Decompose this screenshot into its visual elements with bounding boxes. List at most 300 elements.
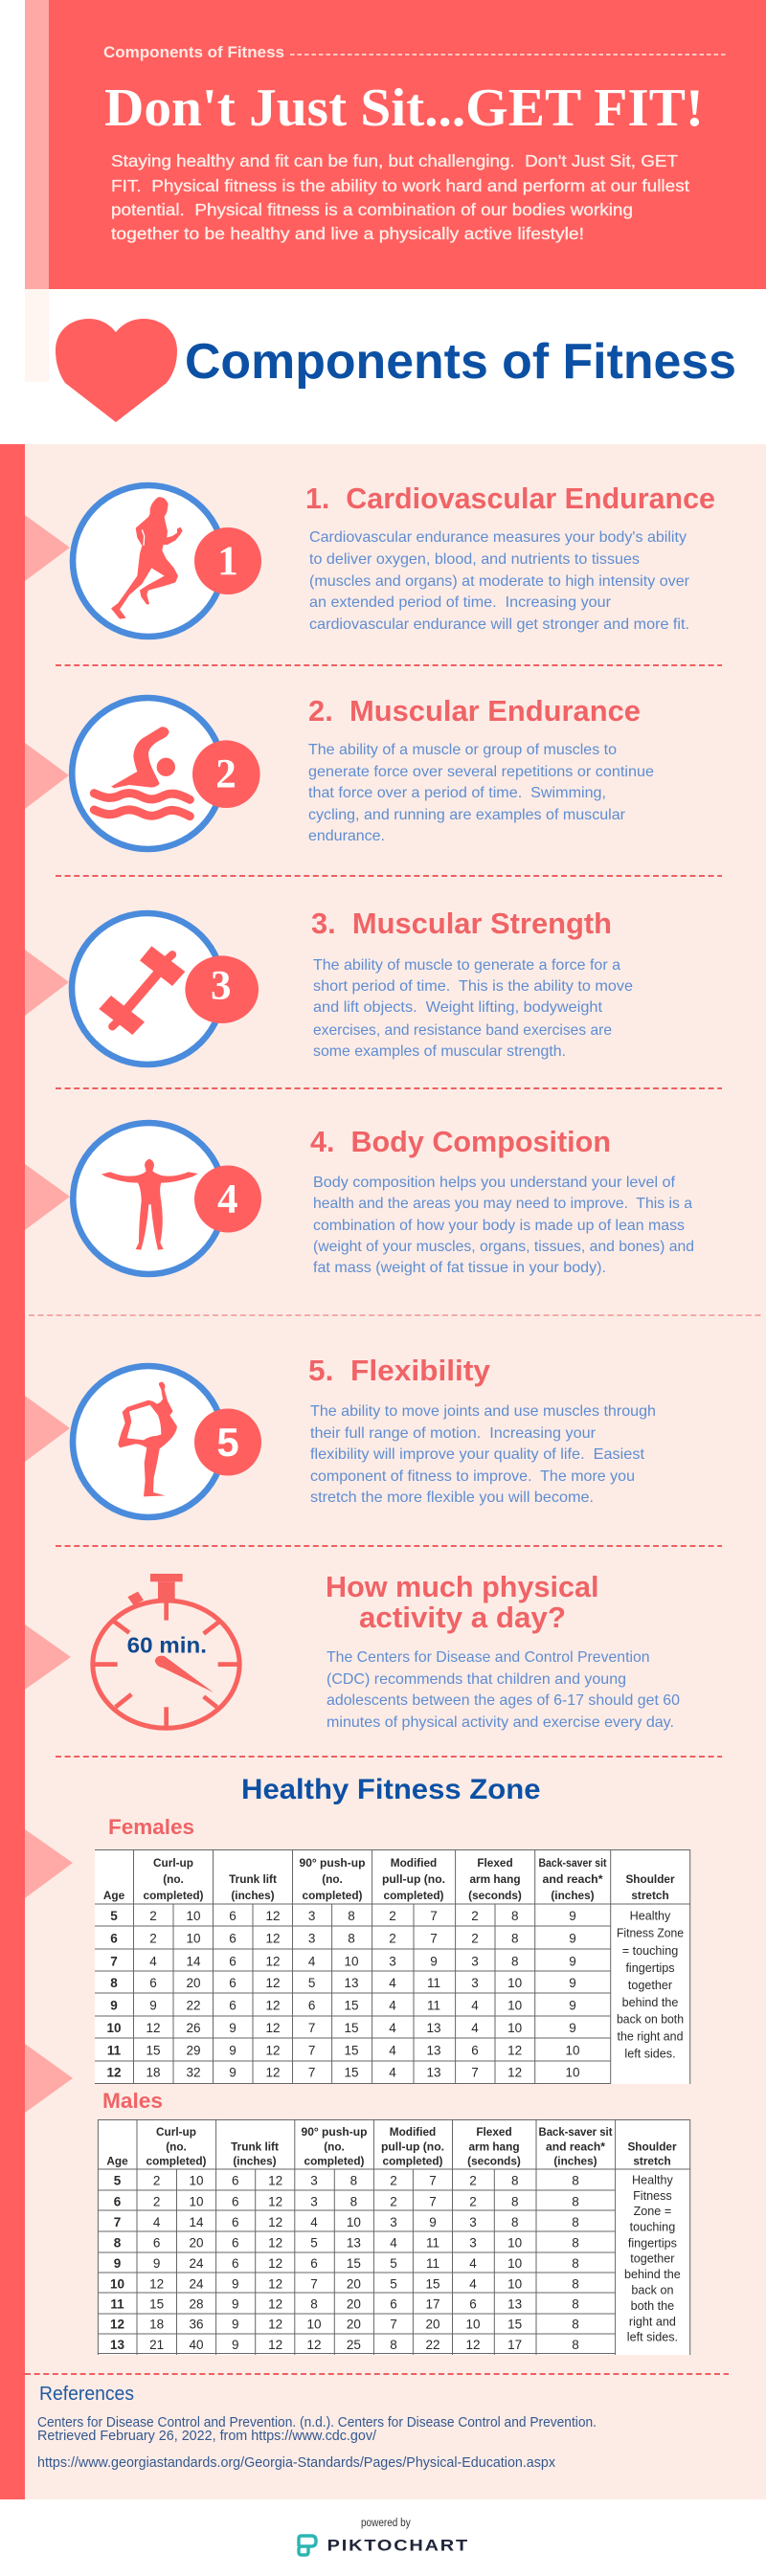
females table header: and reach* [542, 1872, 603, 1886]
section 2: muscular endurance [72, 694, 654, 849]
males shoulder stretch note [624, 2173, 681, 2344]
section: how much physical activity [93, 1570, 680, 1731]
icon: heart [56, 319, 177, 422]
females table data: 6 [110, 1931, 118, 1945]
males shoulder stretch note: Healthy [632, 2173, 673, 2186]
males table data: 36 [189, 2318, 204, 2332]
body text 1: Cardiovascular endurance measures your body's ability [309, 529, 687, 546]
females table data: 7 [471, 2065, 479, 2079]
males table data: 4 [310, 2215, 318, 2229]
body text 2: generate force over several repetitions or continue [308, 764, 654, 780]
males table data: 6 [232, 2195, 238, 2209]
males table data: 8 [572, 2215, 579, 2229]
males table data: 6 [310, 2256, 318, 2271]
males table header: Modified [390, 2125, 436, 2139]
females table header: arm hang [469, 1872, 521, 1886]
icon: human body [73, 1123, 261, 1274]
males table data: 15 [347, 2256, 361, 2271]
heading: components of fitness: Components of Fitness [185, 334, 736, 390]
males table header: pull-up (no. [381, 2139, 444, 2153]
panel: main background [0, 444, 766, 2499]
heading 1: 1. Cardiovascular Endurance [305, 482, 715, 515]
females shoulder stretch note [617, 1909, 684, 2060]
body text 3: The ability of muscle to generate a force for a [313, 957, 620, 974]
females table data: 10 [565, 2044, 580, 2058]
females table header [103, 1856, 675, 1902]
males table data: 24 [189, 2276, 204, 2291]
females table data: 6 [229, 1931, 237, 1945]
references list: Retrieved February 26, 2022, from https://www.cdc.gov/ [37, 2428, 377, 2444]
males table data: 9 [232, 2318, 238, 2332]
females table data: 29 [186, 2044, 201, 2058]
heading: how much physical activity a day: How much physical [326, 1570, 599, 1603]
males table data: 10 [189, 2173, 204, 2187]
males table data: 2 [153, 2195, 160, 2209]
intro paragraph: Staying healthy and fit can be fun, but challenging. Don't Just Sit, GET [111, 151, 678, 170]
males table data: 8 [350, 2173, 357, 2187]
females table header: 90° push-up [299, 1856, 366, 1870]
males table data: 8 [511, 2195, 518, 2209]
females table data: 13 [426, 2044, 441, 2058]
body text 4: Body composition helps you understand your level of [313, 1175, 676, 1191]
males table data: 10 [507, 2276, 522, 2291]
females table data: 13 [344, 1976, 359, 1990]
body text 3: some examples of muscular strength. [313, 1043, 566, 1060]
males table header: 90° push-up [301, 2125, 368, 2139]
males table data: 12 [110, 2318, 124, 2332]
icon: stopwatch [93, 1574, 239, 1728]
body text: CDC recommendation: (CDC) recommends that children and young [327, 1671, 626, 1688]
icon: swimmer [72, 698, 260, 849]
males table data: 8 [572, 2297, 579, 2312]
females table data: 3 [471, 1954, 479, 1968]
intro paragraph [111, 151, 689, 243]
males table data: 13 [347, 2235, 361, 2250]
males table data: 20 [347, 2276, 361, 2291]
females table data: 12 [265, 2044, 281, 2058]
males table header: completed) [383, 2154, 443, 2167]
females table data: 10 [565, 2065, 580, 2079]
body text: CDC recommendation [327, 1649, 680, 1731]
footer: powered by piktochart: PIKTOCHART [327, 2537, 469, 2554]
females table data: 12 [265, 2065, 281, 2079]
females table data: 10 [507, 2021, 522, 2035]
females table data: 2 [471, 1931, 479, 1945]
icon: dumbbell: 3 [211, 963, 231, 1008]
body text: CDC recommendation: The Centers for Disease and Control Prevention [327, 1649, 650, 1666]
females table data: 10 [507, 1999, 522, 2013]
heading: females: Females [108, 1815, 194, 1839]
females table data: 6 [471, 2044, 479, 2058]
females table header: (inches) [231, 1889, 275, 1902]
males table data: 5 [390, 2276, 397, 2291]
males table data: 9 [153, 2256, 160, 2271]
males table data: 15 [425, 2276, 440, 2291]
females table data: 6 [308, 1999, 315, 2013]
females table data: 26 [186, 2021, 201, 2035]
females table data: 4 [471, 1999, 479, 2013]
males table header: arm hang [468, 2139, 520, 2153]
females table data: 9 [229, 2021, 237, 2035]
males table data: 25 [347, 2338, 361, 2352]
females shoulder stretch note: left sides. [624, 2047, 676, 2060]
females table header: completed) [303, 1889, 363, 1902]
males table data: 20 [425, 2318, 440, 2332]
males table header: (no. [166, 2139, 187, 2153]
males table data: 8 [511, 2215, 518, 2229]
icon: runner [73, 485, 261, 637]
body text 5: stretch the more flexible you will become. [310, 1490, 594, 1506]
females shoulder stretch note: back on both [617, 2012, 684, 2026]
males table data: 20 [347, 2297, 361, 2312]
females table header: Trunk lift [229, 1872, 277, 1886]
references list [37, 2414, 597, 2471]
females table data: 6 [229, 1976, 237, 1990]
footer: powered by piktochart: powered by [361, 2518, 411, 2529]
footer: powered by piktochart [299, 2518, 469, 2555]
body text 4: health and the areas you may need to improve. This is a [313, 1196, 692, 1212]
females table data: 13 [426, 2021, 441, 2035]
males table data: 6 [390, 2297, 397, 2312]
males table data: 6 [232, 2235, 238, 2250]
males shoulder stretch note: Fitness [633, 2189, 672, 2203]
icon: runner: 1 [217, 539, 238, 584]
males table data: 7 [114, 2215, 121, 2229]
females table header: completed) [384, 1889, 444, 1902]
females table header: Age [103, 1889, 125, 1902]
females table data: 3 [389, 1954, 396, 1968]
males table data: 10 [110, 2276, 124, 2291]
females table data: 9 [569, 1954, 576, 1968]
body text 2: The ability of a muscle or group of muscles to [308, 742, 617, 758]
males table data: 17 [425, 2297, 440, 2312]
males table data: 8 [572, 2276, 579, 2291]
body text 5: The ability to move joints and use muscles through [310, 1403, 656, 1420]
females table data: 4 [389, 2044, 396, 2058]
males table data: 7 [429, 2195, 437, 2209]
main title: Don't Just Sit...GET FIT! [104, 78, 704, 138]
females table data: 5 [308, 1976, 315, 1990]
males table data: 9 [114, 2256, 121, 2271]
males table data: 5 [310, 2235, 318, 2250]
females table data: 12 [265, 1954, 281, 1968]
males table header: Age [106, 2154, 128, 2167]
males table data: 3 [469, 2215, 477, 2229]
females table data: 7 [110, 1954, 118, 1968]
icon: swimmer: 2 [215, 752, 237, 797]
males table data: 17 [507, 2338, 522, 2352]
females table data: 9 [569, 1909, 576, 1923]
males table data: 3 [310, 2195, 318, 2209]
females table header: (no. [322, 1872, 343, 1886]
males table header: stretch [633, 2154, 671, 2167]
males table data: 15 [149, 2297, 164, 2312]
males table data: 11 [110, 2297, 124, 2312]
males table data: 8 [572, 2338, 579, 2352]
males table data: 12 [268, 2256, 282, 2271]
females table data: 9 [229, 2065, 237, 2079]
males table header: (inches) [553, 2154, 597, 2167]
males table data: 12 [268, 2195, 282, 2209]
females table data: 3 [308, 1931, 315, 1945]
females table data: 2 [149, 1931, 157, 1945]
females table data: 6 [229, 1954, 237, 1968]
males table data: 20 [189, 2235, 204, 2250]
males table data: 9 [232, 2276, 238, 2291]
heading 2: 2. Muscular Endurance [308, 694, 641, 728]
eyebrow label: Components of Fitness [103, 43, 284, 61]
males table data: 9 [232, 2297, 238, 2312]
males table data: 8 [572, 2195, 579, 2209]
heading: how much physical activity a day [326, 1570, 599, 1634]
females table data: 11 [107, 2044, 122, 2058]
references list: Centers for Disease Control and Prevention. (n.d.). Centers for Disease Control and Prevention. [37, 2414, 597, 2430]
females table header: Shoulder [625, 1872, 675, 1886]
females table data: 22 [186, 1999, 201, 2013]
body text 4: fat mass (weight of fat tissue in your body). [313, 1260, 606, 1276]
males table data: 6 [153, 2235, 160, 2250]
females table header: completed) [144, 1889, 204, 1902]
panel: header banner [25, 0, 766, 382]
males table header: Curl-up [156, 2125, 196, 2139]
females table data: 4 [389, 1976, 396, 1990]
section 5: flexibility [73, 1354, 656, 1517]
females table data: 12 [106, 2065, 122, 2079]
females table data: 7 [308, 2021, 315, 2035]
decorative pointer triangles [25, 515, 73, 2113]
males table data: 5 [114, 2173, 122, 2187]
females table data: 12 [265, 1999, 281, 2013]
females shoulder stretch note: Fitness Zone [617, 1927, 684, 1940]
females table data: 12 [265, 1976, 281, 1990]
females shoulder stretch note: behind the [622, 1996, 678, 2009]
males table data: 8 [572, 2235, 579, 2250]
males table data [110, 2173, 579, 2352]
females table data: 9 [569, 1931, 576, 1945]
body text 1: an extended period of time. Increasing your [309, 594, 611, 611]
females table data: 10 [186, 1909, 201, 1923]
males table data: 4 [153, 2215, 161, 2229]
males table data: 8 [350, 2195, 357, 2209]
males table data: 8 [572, 2318, 579, 2332]
males table data: 8 [572, 2173, 579, 2187]
icon: dancer pose: 5 [216, 1420, 239, 1465]
males table data: 4 [469, 2256, 477, 2271]
icon: human body: 4 [217, 1177, 237, 1222]
males shoulder stretch note: Zone = [634, 2205, 671, 2218]
females table data: 8 [511, 1954, 518, 1968]
females shoulder stretch note: together [628, 1979, 672, 1992]
males table data: 12 [306, 2338, 322, 2352]
males table data: 4 [390, 2235, 397, 2250]
body text 5: component of fitness to improve. The more you [310, 1468, 635, 1485]
body text 3: and lift objects. Weight lifting, bodyweight [313, 999, 603, 1016]
males shoulder stretch note: both the [631, 2299, 674, 2313]
body text 5: their full range of motion. Increasing your [310, 1425, 596, 1442]
body text 2: endurance. [308, 828, 385, 844]
females table header: Flexed [477, 1856, 513, 1870]
females table data: 12 [146, 2021, 161, 2035]
males table data: 3 [390, 2215, 397, 2229]
males table data: 4 [469, 2276, 477, 2291]
males table data: 2 [469, 2173, 477, 2187]
males table header [106, 2125, 677, 2167]
males table data: 8 [114, 2235, 122, 2250]
females table data: 12 [265, 2021, 281, 2035]
males table data: 12 [268, 2338, 282, 2352]
males table data: 8 [390, 2338, 397, 2352]
females table header: (no. [163, 1872, 184, 1886]
males table data: 7 [390, 2318, 397, 2332]
females table data: 3 [471, 1976, 479, 1990]
females table data: 7 [308, 2065, 315, 2079]
body text 2: cycling, and running are examples of muscular [308, 807, 625, 823]
males table header: Back-saver sit [538, 2125, 613, 2139]
females table header: Back-saver sit [538, 1856, 607, 1870]
females table data: 10 [106, 2021, 122, 2035]
males table header: (inches) [233, 2154, 277, 2167]
males table data: 12 [268, 2215, 282, 2229]
icon: stopwatch: 60 min. [127, 1633, 207, 1658]
males table data: 2 [390, 2173, 397, 2187]
females shoulder stretch note: = touching [622, 1944, 678, 1958]
males table header: and reach* [546, 2139, 605, 2153]
females table data [106, 1909, 580, 2079]
icon: piktochart logo [299, 2536, 316, 2555]
females table data: 7 [430, 1931, 438, 1945]
females table data: 4 [471, 2021, 479, 2035]
females table data: 10 [186, 1931, 201, 1945]
males table data: 12 [465, 2338, 481, 2352]
females table data: 32 [186, 2065, 201, 2079]
females table data: 15 [344, 2044, 359, 2058]
females table data: 12 [507, 2044, 522, 2058]
males table data: 7 [429, 2173, 437, 2187]
females table data: 6 [229, 1909, 237, 1923]
males table data: 11 [426, 2256, 439, 2271]
females table data: 9 [569, 1976, 576, 1990]
females table header: stretch [631, 1889, 669, 1902]
intro paragraph: together to be healthy and live a physically active lifestyle! [111, 224, 584, 243]
males shoulder stretch note: together [630, 2251, 675, 2265]
body text: CDC recommendation: minutes of physical activity and exercise every day. [327, 1714, 674, 1731]
body text 1: cardiovascular endurance will get stronger and more fit. [309, 616, 689, 633]
heading: males: Males [102, 2089, 163, 2113]
males table header: Shoulder [627, 2139, 677, 2153]
body text 1 [309, 529, 689, 633]
males table header: completed) [146, 2154, 207, 2167]
females table data: 11 [427, 1976, 440, 1990]
females table data: 12 [265, 1909, 281, 1923]
males table data: 12 [268, 2235, 282, 2250]
males table data: 3 [310, 2173, 318, 2187]
icon: dumbbell [72, 913, 259, 1064]
references heading: References [39, 2384, 134, 2405]
males table data: 10 [507, 2235, 522, 2250]
body text 3: short period of time. This is the ability to move [313, 978, 633, 995]
females table data: 7 [430, 1909, 438, 1923]
body text 2: that force over a period of time. Swimming, [308, 785, 606, 801]
females table data: 15 [146, 2044, 161, 2058]
females table data: 6 [229, 1999, 237, 2013]
females table data: 9 [430, 1954, 438, 1968]
females table data: 20 [186, 1976, 201, 1990]
females table header: Modified [391, 1856, 437, 1870]
heading 5: 5. Flexibility [308, 1354, 491, 1387]
males table data: 14 [189, 2215, 204, 2229]
heading: how much physical activity a day: activity a day? [359, 1601, 566, 1634]
males table data: 9 [429, 2215, 437, 2229]
males table data: 10 [306, 2318, 322, 2332]
females table data: 8 [110, 1976, 118, 1990]
males table data: 10 [507, 2256, 522, 2271]
males table header: Flexed [476, 2125, 512, 2139]
males table data: 10 [189, 2195, 204, 2209]
males shoulder stretch note: touching [630, 2221, 675, 2234]
males table data: 2 [153, 2173, 160, 2187]
females table data: 13 [426, 2065, 441, 2079]
males table data: 7 [310, 2276, 318, 2291]
body text 4: combination of how your body is made up of lean mass [313, 1218, 685, 1234]
males table data: 6 [469, 2297, 477, 2312]
males table header: (no. [324, 2139, 345, 2153]
section 1: cardiovascular endurance [73, 482, 715, 637]
males table data: 21 [149, 2338, 164, 2352]
males table data: 13 [507, 2297, 522, 2312]
heading 3: 3. Muscular Strength [311, 907, 612, 940]
females table data: 4 [308, 1954, 316, 1968]
references list: https://www.georgiastandards.org/Georgia-Standards/Pages/Physical-Education.aspx [37, 2454, 555, 2471]
females table data: 9 [149, 1999, 157, 2013]
males shoulder stretch note: back on [631, 2283, 673, 2296]
body text 5: flexibility will improve your quality of life. Easiest [310, 1446, 645, 1463]
females table header: Curl-up [153, 1856, 193, 1870]
females table data: 5 [110, 1909, 118, 1923]
females table data: 9 [569, 1999, 576, 2013]
body text 3 [313, 957, 633, 1060]
females table data: 8 [511, 1931, 518, 1945]
males table data: 9 [232, 2338, 238, 2352]
heading: healthy fitness zone: Healthy Fitness Zone [241, 1774, 540, 1805]
males table data: 13 [110, 2338, 124, 2352]
females table header: (inches) [551, 1889, 595, 1902]
section 3: muscular strength [72, 907, 633, 1064]
males table data: 3 [469, 2235, 477, 2250]
males table data: 20 [347, 2318, 361, 2332]
females table data: 9 [229, 2044, 237, 2058]
body text 4 [313, 1175, 694, 1276]
females table data: 4 [389, 2065, 396, 2079]
females table header: (seconds) [468, 1889, 522, 1902]
males shoulder stretch note: fingertips [628, 2236, 677, 2250]
intro paragraph: FIT. Physical fitness is the ability to work hard and perform at our fullest [111, 176, 689, 195]
males table data: 2 [469, 2195, 477, 2209]
females table data: 10 [507, 1976, 522, 1990]
females table data: 2 [389, 1931, 396, 1945]
males shoulder stretch note: right and [629, 2315, 676, 2328]
females table data: 6 [149, 1976, 157, 1990]
males table data: 12 [268, 2297, 282, 2312]
females table data: 12 [265, 1931, 281, 1945]
males shoulder stretch note: behind the [624, 2268, 681, 2281]
females table data: 9 [569, 2021, 576, 2035]
heading 4: 4. Body Composition [310, 1125, 611, 1158]
females table data: 4 [149, 1954, 157, 1968]
body text 3: exercises, and resistance band exercises are [313, 1022, 612, 1039]
males table data: 28 [189, 2297, 204, 2312]
males table header: Trunk lift [231, 2139, 279, 2153]
males table data: 6 [114, 2195, 122, 2209]
